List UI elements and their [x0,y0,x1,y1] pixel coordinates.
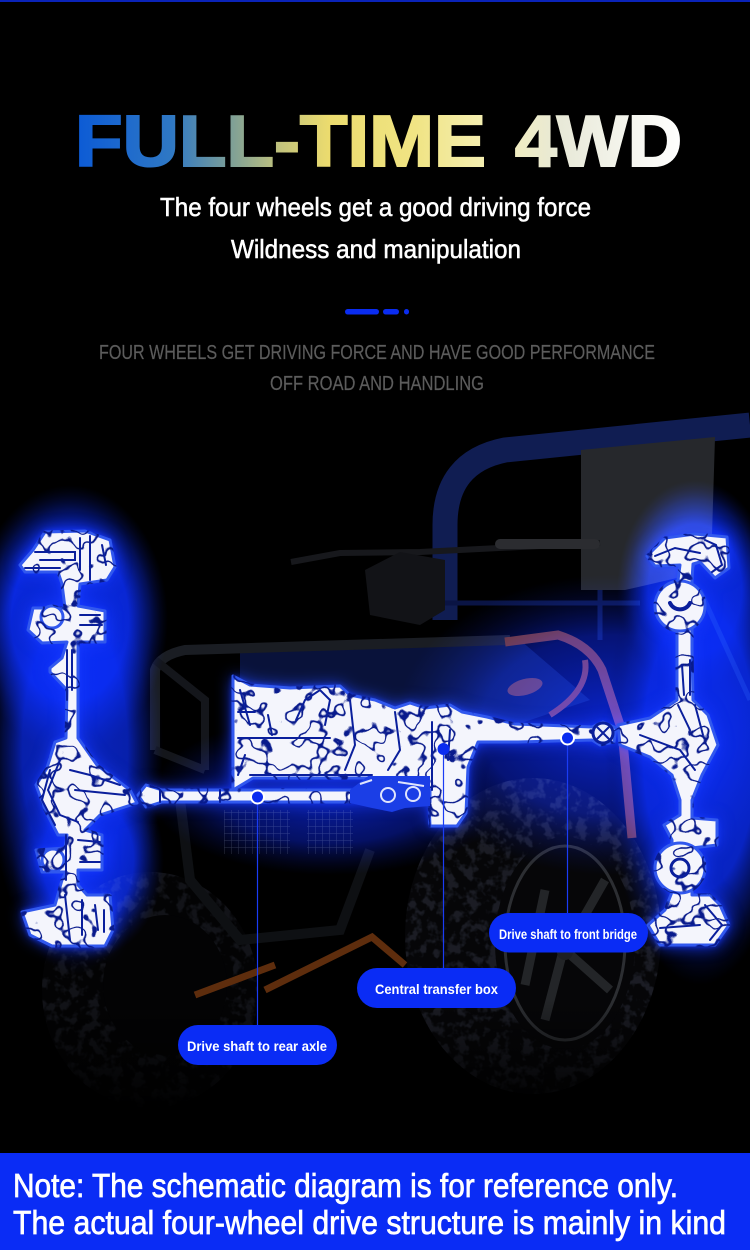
label: drive shaft to front bridge: Drive shaft to front bridge [499,927,637,942]
marker: drive shaft to front bridge [561,732,574,915]
left rear axle [20,531,137,946]
marker: drive shaft to rear axle [251,790,264,1028]
english description [99,342,655,395]
left tire [42,872,258,1108]
body and cage [155,635,632,940]
label: drive shaft to front bridge [489,913,648,952]
fade to black at bottom [0,1000,750,1153]
label: drive shaft to rear axle: Drive shaft to rear axle [187,1038,327,1054]
english description: OFF ROAD AND HANDLING [270,373,484,395]
handlebar and seat [291,539,600,625]
transfer blobs [350,776,430,812]
subtitle: Wildness and manipulation [231,234,521,264]
right front axle [618,534,729,945]
radiator grille [224,810,353,854]
transmission and shaft [138,676,616,826]
title [75,102,682,182]
subtitle [160,192,591,264]
drivetrain schematic [20,531,729,946]
note banner [0,1153,750,1250]
title: 4WD [515,102,682,182]
note banner: Note: The schematic diagram is for reference only. [13,1167,678,1204]
right tire and rim [405,778,661,1094]
divider dashes [345,309,409,314]
roll bar and canopy [445,425,750,700]
blue glow [0,480,750,985]
label: drive shaft to rear axle [178,1025,337,1065]
marker: central transfer box [438,743,450,970]
top accent line [0,0,750,2]
label: central transfer box: Central transfer box [375,981,498,997]
vehicle background photo [0,425,750,1153]
universal joint [593,723,613,743]
suspension arms [195,937,405,995]
title: FULL-TIME [75,102,486,182]
label: central transfer box [357,968,516,1008]
subtitle: The four wheels get a good driving force [160,192,591,222]
